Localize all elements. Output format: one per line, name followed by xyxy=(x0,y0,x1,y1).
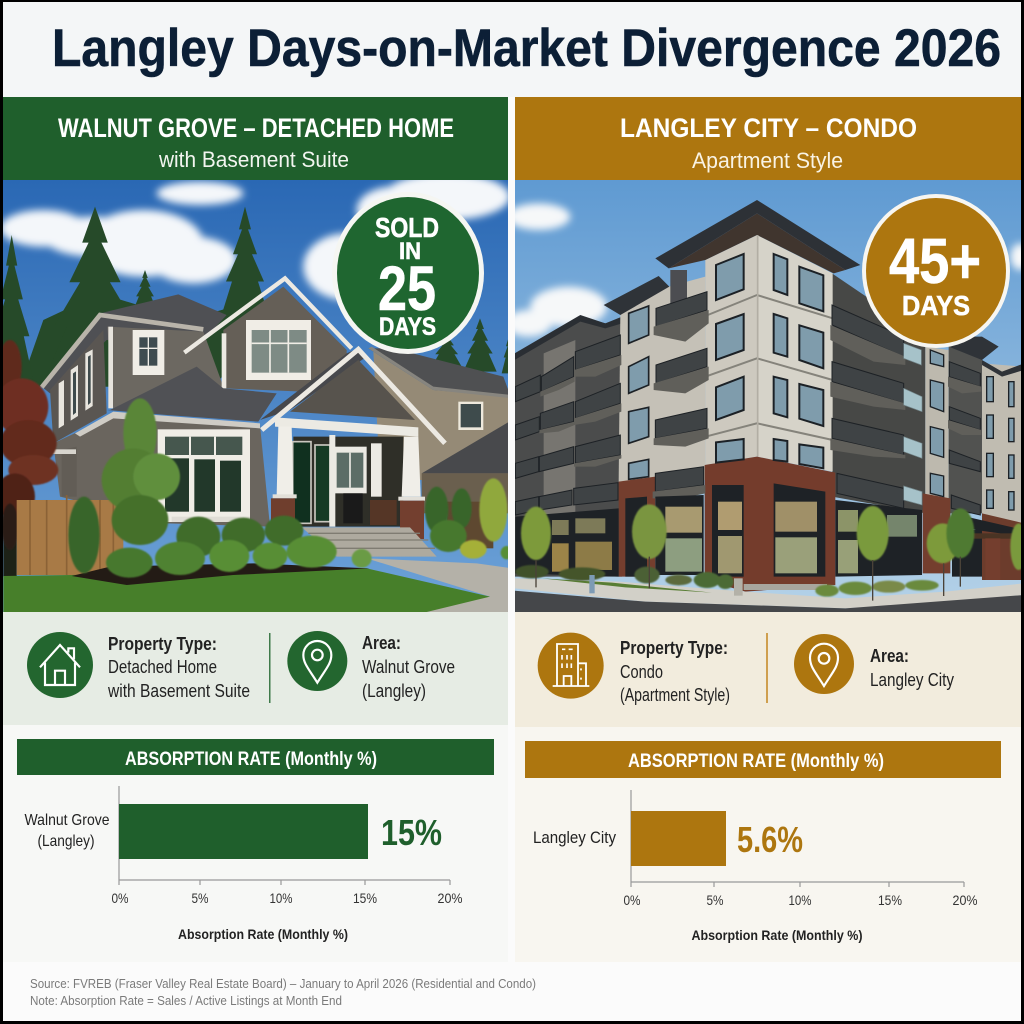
bar chart: 10% xyxy=(788,892,812,908)
bar chart xyxy=(24,786,462,942)
panel: Langley City condo xyxy=(505,97,1024,962)
area text: Langley City xyxy=(870,670,954,690)
property type text: (Apartment Style) xyxy=(620,685,730,705)
area text: Area: xyxy=(362,633,401,653)
bar chart: 5% xyxy=(192,890,208,906)
area text: Walnut Grove xyxy=(362,657,455,677)
bar chart: 0% xyxy=(112,890,128,906)
badge: sold in 25 days: 25 xyxy=(378,254,436,324)
bar chart: 15% xyxy=(878,892,902,908)
badge: 45+ days: 45+ xyxy=(889,225,981,297)
chart heading: ABSORPTION RATE (Monthly %) xyxy=(125,749,377,770)
header band xyxy=(3,2,1021,97)
badge: sold in 25 days xyxy=(332,192,484,354)
property type text xyxy=(107,634,250,701)
area text xyxy=(362,633,455,701)
chart heading: ABSORPTION RATE (Monthly %) xyxy=(628,751,884,772)
bar chart: 5% xyxy=(706,892,724,908)
icon: map pin xyxy=(794,634,854,694)
bar chart: 10% xyxy=(270,890,292,906)
panel: Walnut Grove detached home xyxy=(0,97,518,962)
badge: sold in 25 days: IN xyxy=(399,238,421,265)
icon: house xyxy=(27,632,93,698)
chart panel: Langley City absorption rate xyxy=(515,727,1021,962)
icon: apartment building xyxy=(538,633,604,699)
bar chart: 20% xyxy=(952,892,978,908)
chart heading xyxy=(17,739,494,775)
area text xyxy=(870,646,954,690)
bar chart: 15% xyxy=(353,890,377,906)
right heading band: Apartment Style xyxy=(692,148,843,173)
bar chart: Walnut Grove xyxy=(24,812,110,829)
left heading band xyxy=(3,97,508,180)
info strip: property type and area xyxy=(3,612,508,725)
photo: condo building xyxy=(505,180,1024,612)
photo: detached house xyxy=(0,173,518,612)
property type text: with Basement Suite xyxy=(107,681,250,701)
bar chart: Absorption Rate (Monthly %) xyxy=(178,926,348,942)
badge: sold in 25 days: DAYS xyxy=(379,313,436,341)
icon: map pin xyxy=(287,631,347,691)
source note: Source: FVREB (Fraser Valley Real Estate Board) – January to April 2026 (Residential and Condo) xyxy=(30,976,536,991)
source note xyxy=(30,976,536,1008)
badge: 45+ days xyxy=(862,194,1010,348)
bar chart: 0% xyxy=(624,892,640,908)
property type text: Property Type: xyxy=(620,638,728,658)
info strip: property type and area xyxy=(515,612,1021,727)
bar chart: 15% xyxy=(381,812,442,853)
property type text: Condo xyxy=(620,662,663,682)
property type text: Detached Home xyxy=(108,657,217,677)
badge: sold in 25 days: SOLD xyxy=(375,212,439,243)
chart panel: Walnut Grove absorption rate xyxy=(3,725,508,962)
area text: (Langley) xyxy=(362,681,426,701)
left heading band: with Basement Suite xyxy=(158,147,349,172)
badge: 45+ days: DAYS xyxy=(902,290,970,321)
property type text xyxy=(620,638,730,705)
bar chart: (Langley) xyxy=(38,833,94,850)
right heading band: LANGLEY CITY – CONDO xyxy=(620,113,917,143)
property type text: Property Type: xyxy=(108,634,217,654)
left heading band: WALNUT GROVE – DETACHED HOME xyxy=(58,113,454,143)
bar chart: Absorption Rate (Monthly %) xyxy=(692,927,862,943)
source note: Note: Absorption Rate = Sales / Active Listings at Month End xyxy=(30,993,342,1008)
bar chart: 20% xyxy=(438,890,462,906)
bar chart: 5.6% xyxy=(737,819,803,860)
bar chart xyxy=(533,790,978,943)
right heading band xyxy=(515,97,1021,180)
area text: Area: xyxy=(870,646,909,666)
chart heading xyxy=(525,741,1001,778)
bar chart: Langley City xyxy=(533,828,616,847)
